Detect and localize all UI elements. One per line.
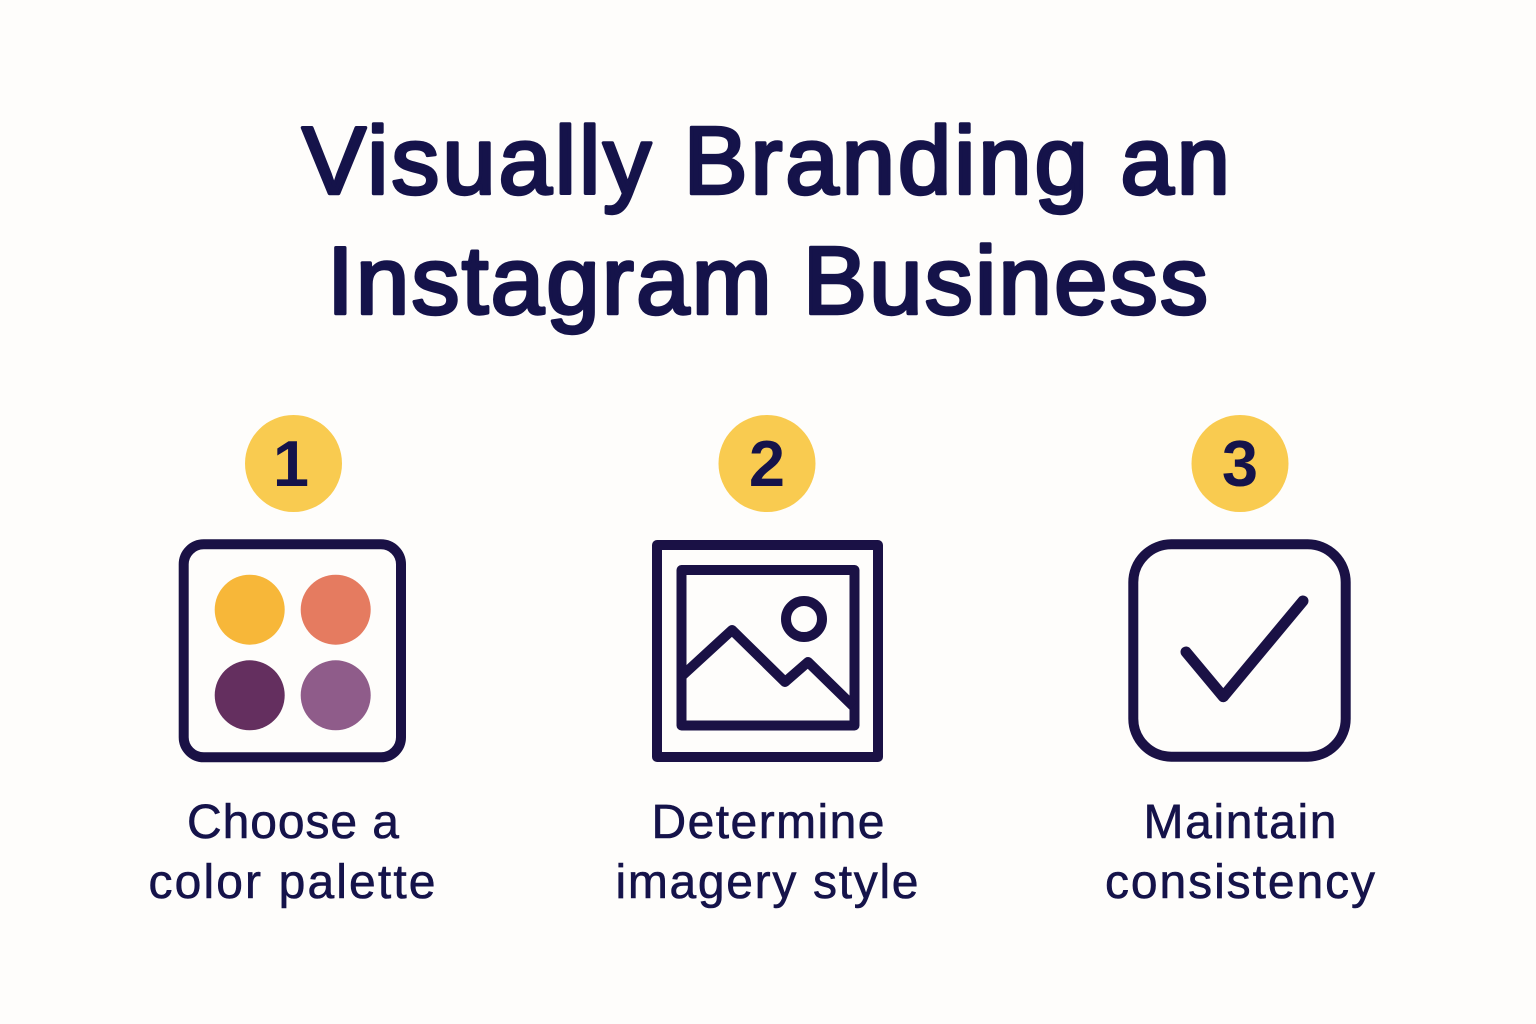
label: determine imagery style — [616, 796, 918, 909]
panel: step 1 — [148, 415, 436, 909]
number badge 1: 1 — [273, 427, 309, 500]
label: determine imagery style: imagery style — [616, 856, 918, 909]
label: maintain consistency: Maintain — [1144, 796, 1336, 849]
number badge 2: 2 — [749, 427, 785, 500]
label: maintain consistency — [1105, 796, 1375, 909]
icon: color palette — [184, 544, 401, 757]
icon: framed image — [657, 545, 878, 757]
label: choose a color palette: color palette — [148, 856, 436, 909]
label: choose a color palette — [148, 796, 436, 909]
icon: checkmark box — [1133, 544, 1346, 757]
label: determine imagery style: Determine — [652, 796, 884, 849]
number badge 1 — [245, 415, 342, 512]
panel: step 2 — [616, 415, 918, 909]
number badge 3 — [1192, 415, 1288, 512]
title: Instagram Business — [327, 228, 1208, 334]
number badge 3: 3 — [1222, 427, 1258, 500]
label: choose a color palette: Choose a — [187, 796, 399, 849]
panel: step 3 — [1105, 415, 1375, 909]
label: maintain consistency: consistency — [1105, 856, 1375, 909]
title: Visually Branding an — [302, 108, 1230, 214]
number badge 2 — [718, 415, 816, 512]
title — [302, 108, 1230, 334]
